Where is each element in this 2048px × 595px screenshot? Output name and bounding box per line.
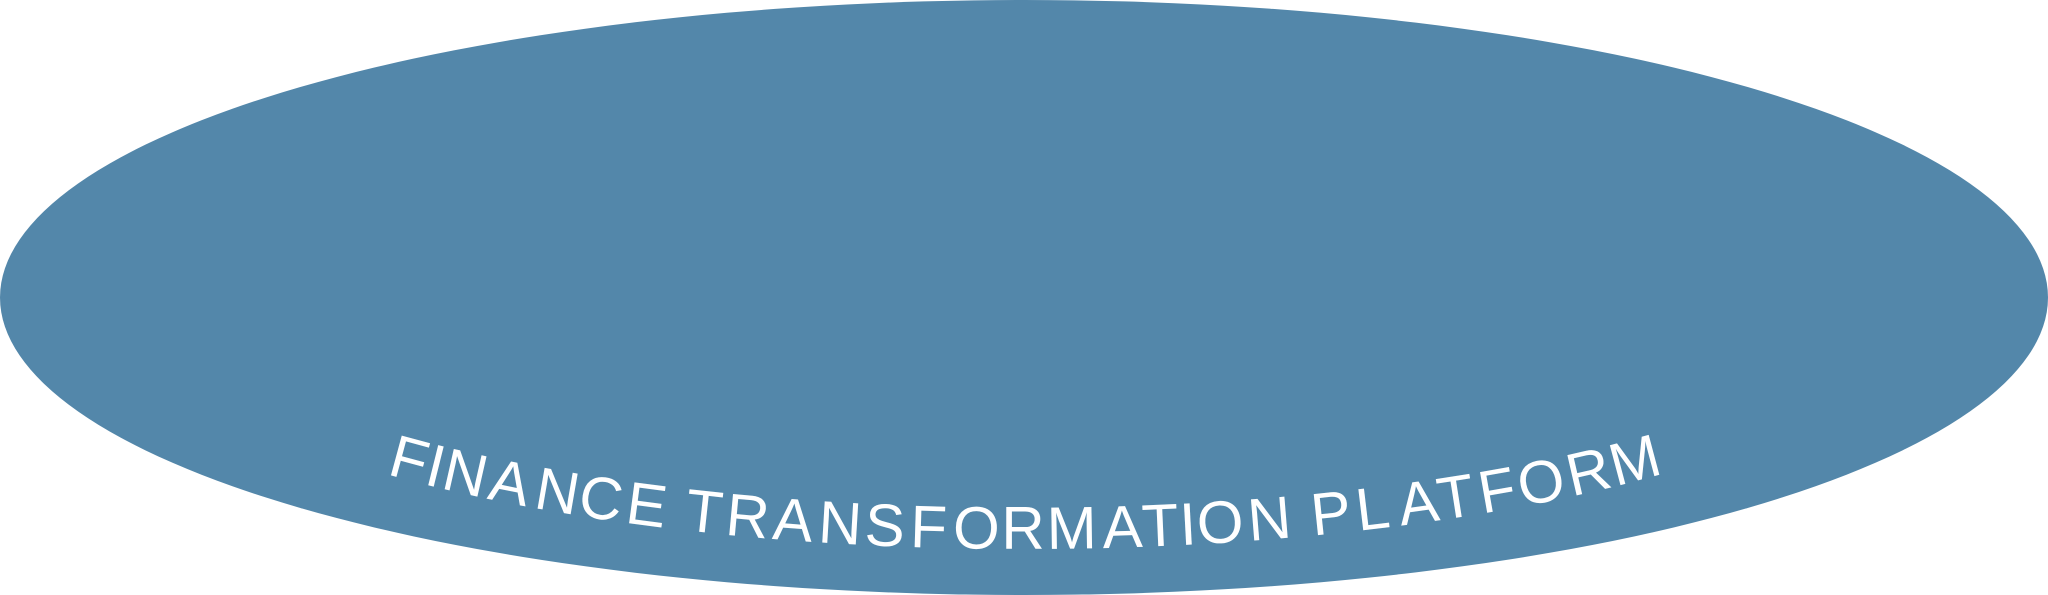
title: curved platform label: FINANCE TRANSFORMATION PLATFORM: [383, 421, 1667, 562]
